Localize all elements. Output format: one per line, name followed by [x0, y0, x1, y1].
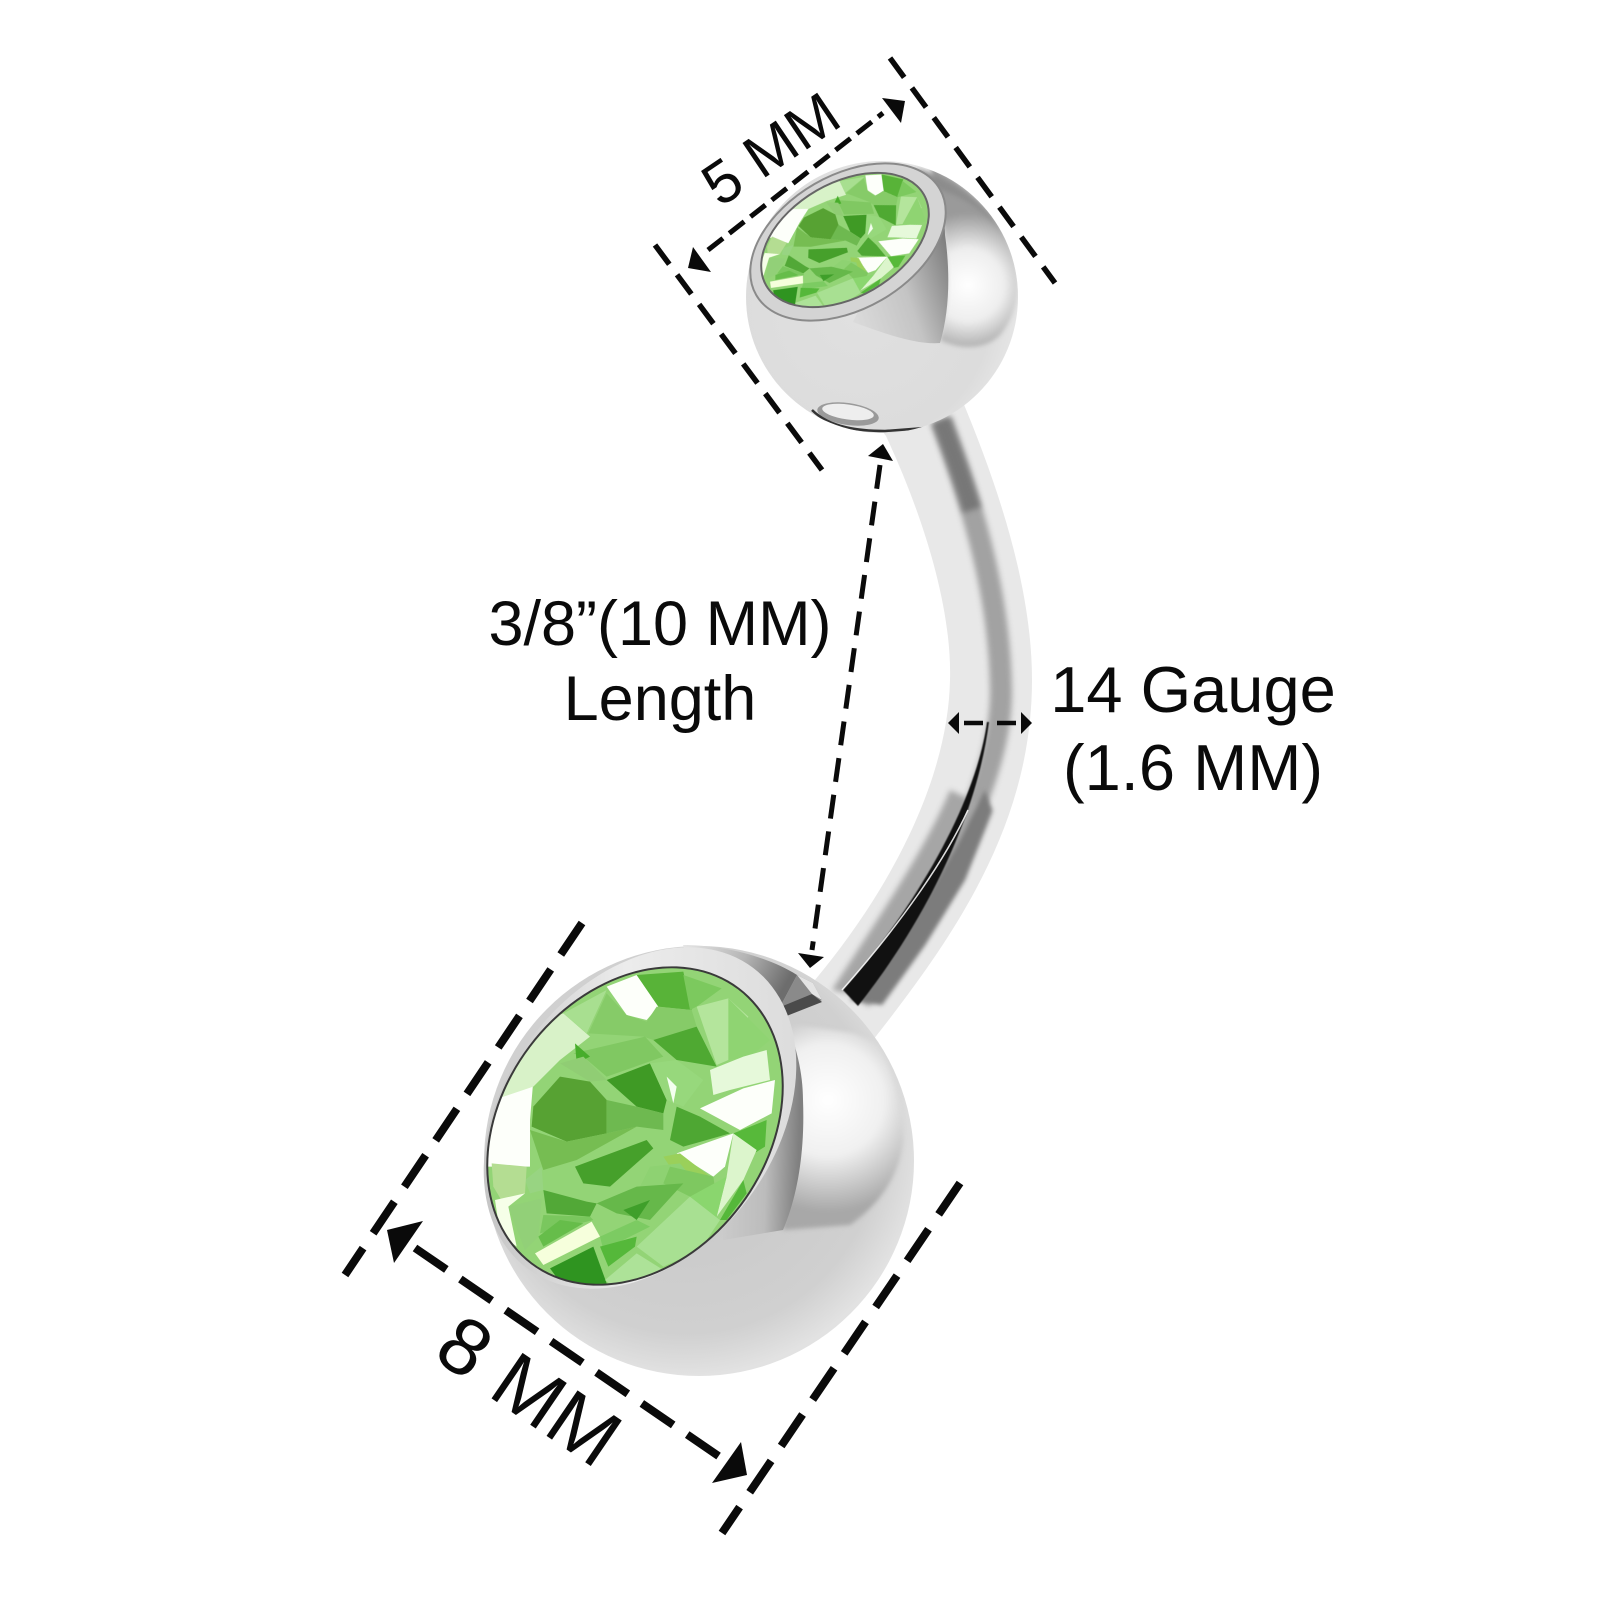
bezel wall — [723, 953, 803, 1240]
label: 14 Gauge — [1050, 653, 1336, 726]
large ball with gem — [484, 945, 914, 1376]
arrowheads — [387, 1221, 423, 1263]
extension line left — [345, 923, 582, 1275]
bezel ring — [419, 887, 861, 1349]
gem facets — [488, 968, 782, 1284]
bezel ring — [723, 131, 973, 353]
label: 3/8”(10 MM) — [488, 589, 832, 659]
dashed line — [812, 465, 880, 950]
dimension: gauge — [948, 653, 1336, 804]
extension line right — [890, 58, 1055, 283]
arrowheads — [882, 98, 905, 123]
extension line right — [722, 1183, 960, 1533]
arrowheads — [868, 444, 893, 461]
label: 5 MM — [690, 79, 852, 219]
gem dark seat — [425, 908, 845, 1344]
threaded hole — [817, 402, 879, 426]
bezel wall — [860, 228, 948, 344]
dimension: gauge: (1.6 MM) — [1063, 731, 1323, 804]
top shading — [916, 167, 996, 224]
small gem facets — [762, 174, 928, 306]
small ball with gem — [746, 161, 1018, 433]
extension line left — [655, 245, 822, 470]
dimension: 5 MM — [655, 58, 1055, 470]
ball body — [484, 946, 914, 1376]
dimension line — [708, 113, 883, 250]
arrow — [948, 712, 1032, 734]
ball highlight — [783, 1023, 903, 1230]
ball body — [746, 161, 1018, 433]
ball highlight — [930, 165, 1018, 347]
dimension: length — [488, 444, 893, 968]
curved bar — [815, 395, 1032, 1040]
dimension: length: Length — [564, 664, 756, 734]
bezel wedge — [683, 945, 797, 1007]
dimension: 8 MM — [345, 923, 960, 1533]
dimension line — [415, 1248, 720, 1457]
crescent seam — [812, 410, 925, 431]
label: 8 MM — [421, 1298, 637, 1484]
neck collar — [780, 975, 822, 1017]
